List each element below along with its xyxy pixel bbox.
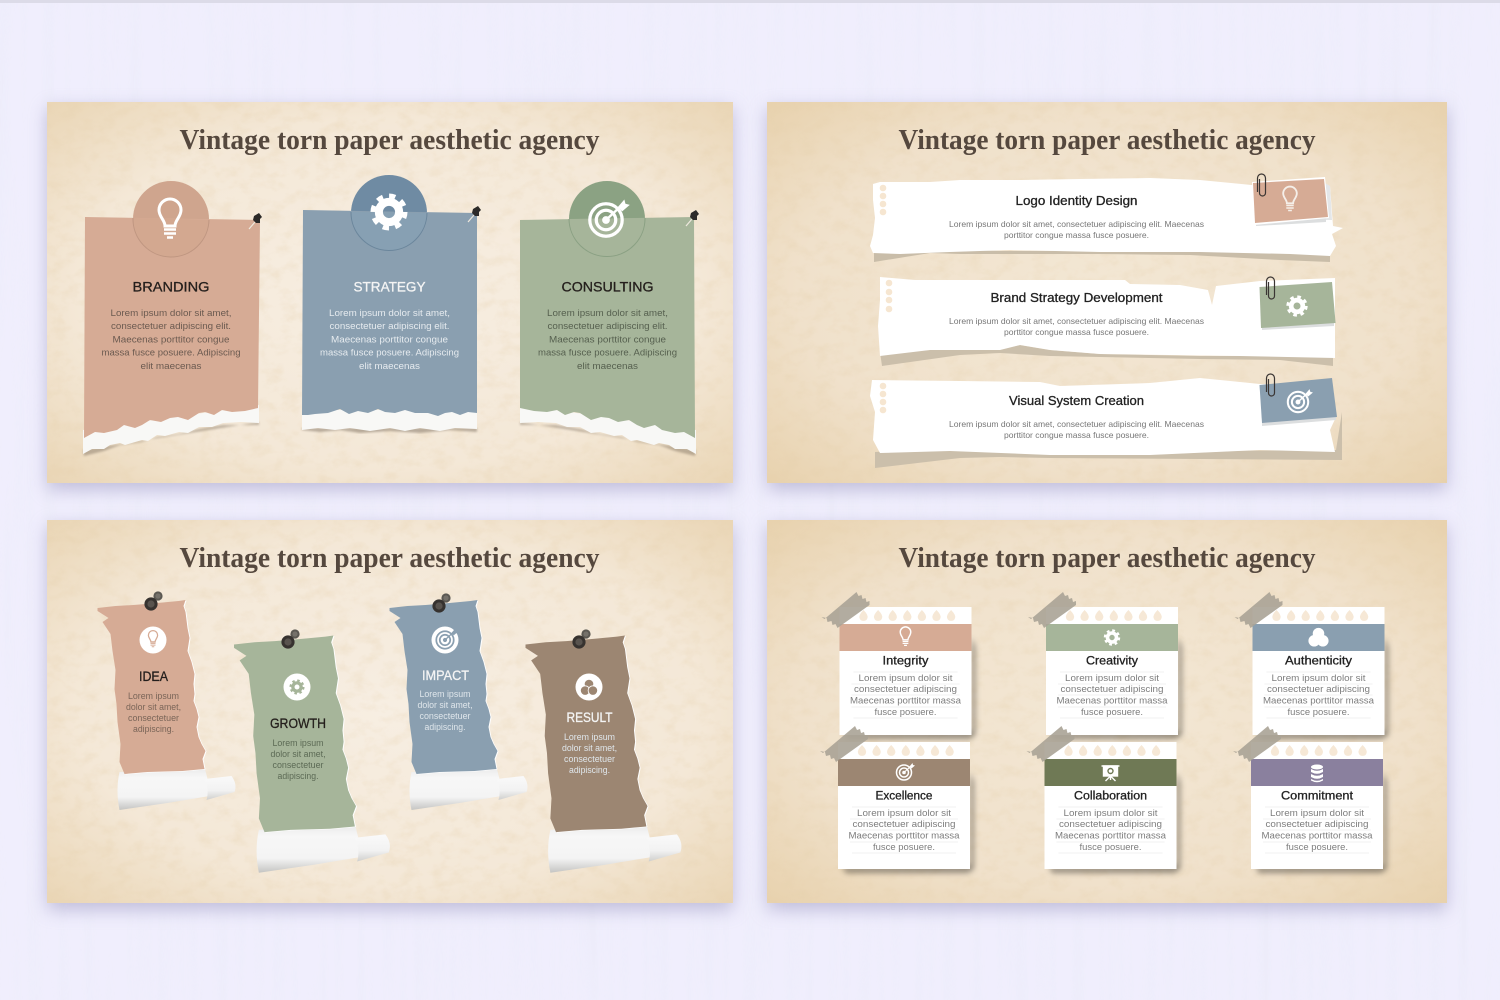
text: consulting body: Lorem ipsum dolor sit amet, [547, 308, 668, 319]
panel: torn vertical strips [47, 520, 733, 910]
icon: paperclip [1266, 277, 1274, 299]
note: excellence [820, 726, 974, 873]
icon: gear [373, 196, 405, 228]
text [562, 732, 617, 775]
text: branding body: Lorem ipsum dolor sit amet, [110, 308, 232, 319]
text: fusce posuere. [1286, 842, 1348, 853]
icon: paperclip [1266, 374, 1274, 396]
text: Lorem ipsum dolor sit [858, 673, 953, 684]
heading: Authenticity [1285, 656, 1352, 668]
strip: impact [390, 593, 528, 810]
text: Lorem ipsum dolor sit amet, consectetuer adipiscing elit. Maecenas [949, 316, 1204, 326]
text: dolor sit amet, [418, 700, 472, 710]
text: consulting body: Maecenas porttitor congue [549, 334, 666, 346]
text: branding body: massa fusce posuere. Adipiscing [102, 348, 240, 358]
heading: strategy: STRATEGY [354, 280, 426, 294]
icon: paperclip [1258, 174, 1266, 196]
heading: Creativity [1086, 656, 1138, 668]
text: Maecenas porttitor massa [1262, 830, 1373, 842]
heading: Integrity [882, 656, 929, 668]
icon: thumbtack [144, 591, 163, 611]
card: strategy [302, 175, 481, 433]
note: lightbulb [1252, 174, 1332, 226]
text: consulting body: consectetuer adipiscing elit. [548, 321, 668, 332]
text: consulting body [538, 308, 677, 372]
text [1055, 808, 1167, 853]
icon [900, 627, 911, 645]
panel: three torn cards [47, 102, 733, 490]
icon: circles badge [576, 674, 602, 700]
strip: brand strategy development [878, 277, 1336, 366]
text: consectetuer [128, 713, 179, 723]
text: consectetuer adipiscing [852, 819, 955, 830]
text: fusce posuere. [873, 842, 935, 853]
text: adipiscing. [424, 722, 466, 732]
text: fusce posuere. [1288, 707, 1350, 718]
panel: torn paper strips [767, 102, 1447, 490]
text: Lorem ipsum [272, 738, 324, 748]
heading: consulting: CONSULTING [562, 280, 654, 294]
heading: Commitment [1281, 790, 1354, 802]
text [949, 419, 1204, 440]
title: Vintage torn paper aesthetic agency [180, 543, 600, 574]
heading: GROWTH [270, 716, 326, 731]
icon [1105, 631, 1119, 644]
panel: taped notes [767, 520, 1447, 910]
text: Lorem ipsum [420, 689, 470, 699]
icon: thumbtack [432, 593, 451, 613]
heading: Brand Strategy Development [990, 291, 1163, 305]
note: target [1260, 374, 1337, 426]
text: strategy body: Maecenas porttitor congue [331, 334, 448, 346]
text: Lorem ipsum dolor sit [1270, 808, 1364, 819]
text: dolor sit amet, [270, 749, 326, 759]
text [1262, 808, 1373, 853]
heading: branding: BRANDING [132, 280, 210, 294]
icon: gear badge [284, 674, 310, 700]
text: Maecenas porttitor massa [850, 696, 962, 706]
text: adipiscing. [133, 724, 174, 734]
icon: thumbtack [281, 629, 300, 649]
text: consectetuer [564, 754, 615, 764]
text [1056, 673, 1168, 718]
note: commitment [1233, 726, 1387, 873]
text: consectetuer adipiscing [1060, 684, 1163, 695]
text: Lorem ipsum [128, 691, 179, 701]
text: consectetuer adipiscing [854, 684, 957, 695]
text [949, 219, 1204, 240]
icon: lightbulb [1283, 187, 1297, 210]
text: Maecenas porttitor massa [1263, 696, 1375, 706]
title: Vintage torn paper aesthetic agency [180, 125, 600, 156]
text: Lorem ipsum dolor sit amet, consectetuer adipiscing elit. Maecenas [949, 219, 1204, 229]
text: consectetuer adipiscing [1266, 819, 1368, 830]
text: branding body: Maecenas porttitor congue [112, 334, 230, 346]
icon: pushpin [686, 210, 699, 226]
text: dolor sit amet, [126, 702, 181, 712]
text: branding body: consectetuer adipiscing elit. [111, 321, 231, 332]
strip: idea [98, 591, 236, 810]
text [126, 691, 181, 734]
strip: result [526, 629, 681, 873]
text: strategy body: consectetuer adipiscing elit. [330, 321, 450, 332]
icon: database [1311, 764, 1323, 782]
text: porttitor congue massa fusce posuere. [1004, 430, 1149, 440]
icon: presentation board [1102, 766, 1120, 781]
heading: Visual System Creation [1009, 394, 1144, 408]
icon: pushpin [468, 206, 481, 222]
text: strategy body: Lorem ipsum dolor sit amet, [329, 308, 450, 319]
tape [1028, 592, 1076, 628]
heading: Logo Identity Design [1016, 194, 1138, 208]
icon [896, 763, 915, 780]
text: fusce posuere. [874, 707, 936, 718]
text: Maecenas porttitor massa [848, 830, 960, 842]
text: adipiscing. [278, 771, 318, 781]
tape [1233, 726, 1281, 762]
text: consectetuer [272, 760, 324, 770]
heading: Collaboration [1074, 790, 1147, 802]
text [1263, 673, 1375, 718]
text: fusce posuere. [1080, 842, 1142, 853]
strip: growth [234, 629, 390, 873]
text: branding body [102, 308, 240, 372]
heading: RESULT [566, 710, 612, 725]
icon: target [590, 199, 630, 236]
text: porttitor congue massa fusce posuere. [1004, 327, 1149, 337]
icon: pushpin [249, 213, 262, 229]
card: consulting [520, 181, 699, 456]
dots [886, 280, 892, 312]
note: authenticity [1234, 592, 1388, 739]
text: strategy body: massa fusce posuere. Adipiscing [320, 348, 459, 358]
strip: logo identity design [870, 174, 1343, 262]
card: branding [83, 181, 262, 456]
heading: IMPACT [422, 668, 469, 683]
text: fusce posuere. [1081, 707, 1143, 718]
title: Vintage torn paper aesthetic agency [898, 543, 1316, 574]
text [270, 738, 326, 781]
text: Maecenas porttitor massa [1056, 696, 1168, 706]
icon: target badge [432, 626, 458, 654]
text: strategy body [320, 308, 459, 372]
text: Maecenas porttitor massa [1055, 830, 1167, 842]
text [850, 673, 962, 718]
dots [880, 383, 886, 413]
strip: visual system creation [870, 374, 1342, 468]
text: consectetuer adipiscing [1267, 684, 1370, 695]
note: gear [1260, 277, 1336, 330]
text [418, 689, 472, 732]
tape [1234, 592, 1282, 628]
text: branding body: elit maecenas [140, 361, 202, 372]
tape [1026, 726, 1074, 762]
text: Lorem ipsum dolor sit [1064, 808, 1158, 819]
text: Lorem ipsum dolor sit amet, consectetuer adipiscing elit. Maecenas [949, 419, 1204, 429]
text: consulting body: elit maecenas [577, 361, 638, 372]
text: strategy body: elit maecenas [359, 361, 420, 372]
text: consectetuer adipiscing [1059, 819, 1162, 830]
icon: thumbtack [572, 629, 591, 649]
heading: Excellence [876, 790, 932, 802]
icon: gear [1288, 297, 1306, 315]
note: creativity [1028, 592, 1182, 739]
text [949, 316, 1204, 337]
dots [880, 185, 886, 215]
text: adipiscing. [569, 765, 610, 775]
heading: IDEA [139, 669, 168, 684]
icon [1309, 628, 1328, 646]
text: consulting body: massa fusce posuere. Adipiscing [538, 348, 677, 358]
icon: lightbulb [159, 199, 181, 238]
icon: lightbulb badge [140, 626, 166, 654]
text: consectetuer [420, 711, 471, 721]
note: collaboration [1026, 726, 1180, 873]
text: porttitor congue massa fusce posuere. [1004, 230, 1149, 240]
title: Vintage torn paper aesthetic agency [898, 125, 1316, 156]
text: dolor sit amet, [562, 743, 617, 753]
text [848, 808, 960, 853]
text: Lorem ipsum dolor sit [1272, 673, 1366, 684]
text: Lorem ipsum dolor sit [857, 808, 951, 819]
icon: target [1288, 389, 1313, 412]
text: Lorem ipsum dolor sit [1065, 673, 1159, 684]
tape [820, 726, 868, 762]
text: Lorem ipsum [564, 732, 615, 742]
note: integrity [822, 592, 976, 739]
tape [822, 592, 870, 628]
